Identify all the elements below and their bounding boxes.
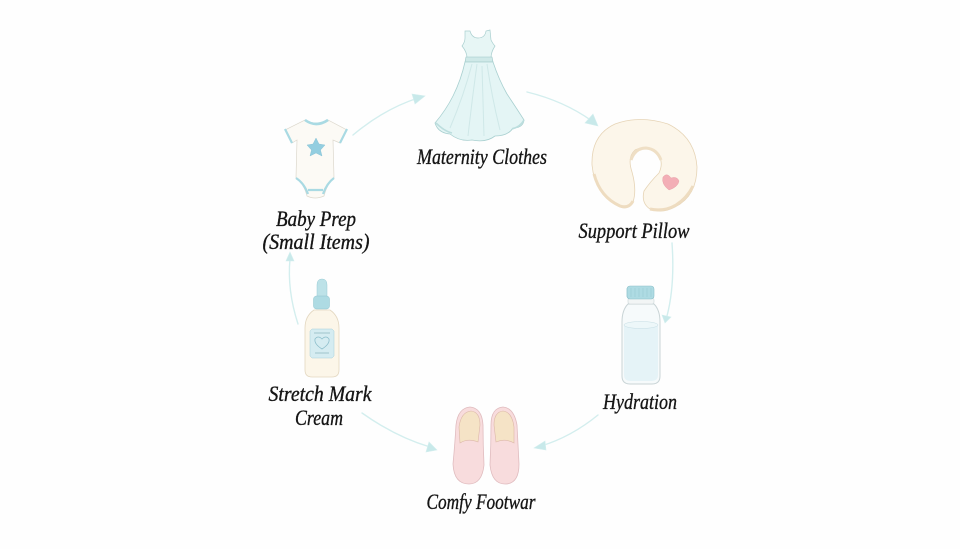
label: Stretch Mark Cream: Stretch Mark — [268, 381, 373, 406]
label: Comfy Footwar: Comfy Footwar — [426, 489, 536, 514]
icon: left shoe — [453, 407, 484, 484]
icon: water bottle — [622, 286, 660, 384]
icon: heart — [663, 175, 679, 190]
label: Support Pillow: Support Pillow — [578, 218, 690, 243]
item: support pillow — [578, 120, 697, 243]
label: Stretch Mark Cream — [268, 381, 373, 430]
item: comfy footwear — [426, 407, 536, 514]
arrow: support pillow to hydration — [662, 243, 673, 323]
item: stretch mark cream — [268, 279, 373, 430]
item: maternity clothes — [416, 30, 547, 169]
item: baby prep — [262, 120, 370, 254]
label: Hydration: Hydration — [602, 389, 677, 414]
label: Baby Prep (Small Items): (Small Items) — [262, 229, 370, 254]
arrow: baby prep to maternity clothes — [353, 94, 425, 135]
arrow: hydration to comfy footwear — [534, 415, 598, 450]
item: hydration — [602, 286, 677, 414]
icon: dress — [435, 30, 524, 141]
arrow: stretch mark cream to baby prep — [286, 252, 298, 324]
arrow: stretch mark cream to comfy footwear — [362, 413, 437, 452]
icon: dropper bottle — [305, 279, 339, 377]
icon: right shoe — [490, 407, 519, 484]
icon: cream label with heart — [310, 329, 334, 358]
label: Baby Prep (Small Items): Baby Prep — [276, 206, 356, 231]
label: Stretch Mark Cream: Cream — [295, 405, 343, 430]
label: Maternity Clothes: Maternity Clothes — [416, 144, 547, 169]
label: Baby Prep (Small Items) — [262, 206, 370, 254]
arrow: maternity clothes to support pillow — [527, 92, 598, 126]
icon: onesie — [285, 120, 347, 198]
icon: u-shaped pillow — [592, 120, 697, 211]
icon: star — [307, 138, 325, 156]
